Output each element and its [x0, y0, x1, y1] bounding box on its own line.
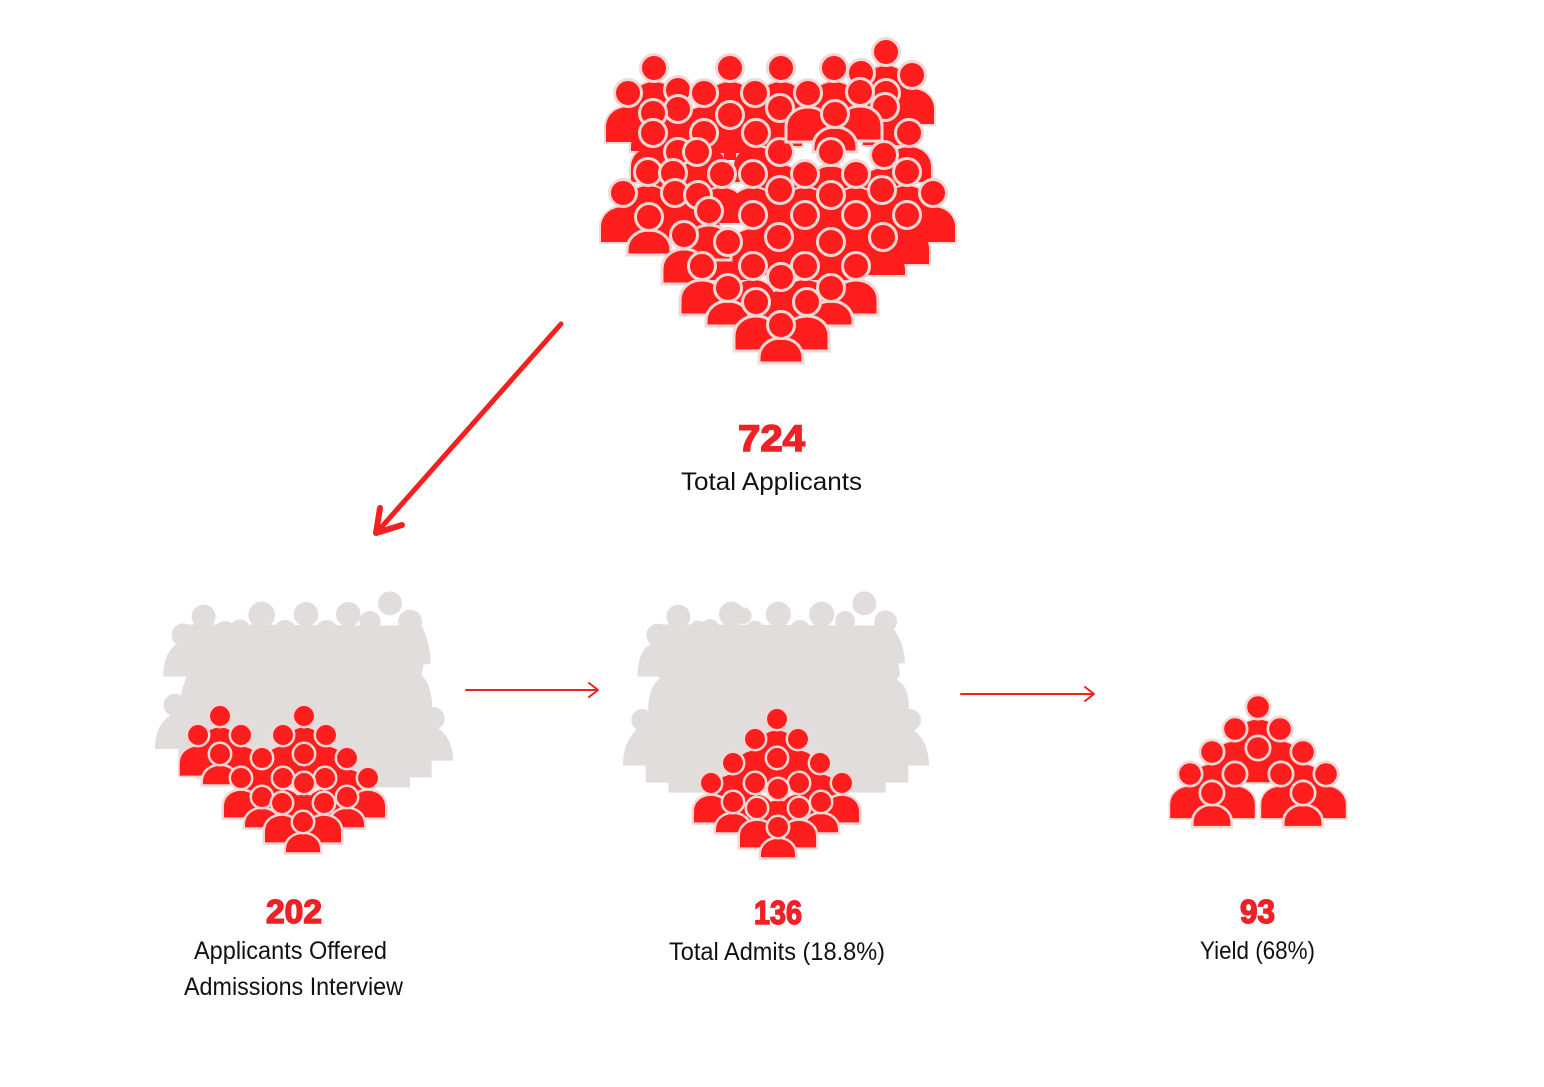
pictogram: 93 yield — [1170, 695, 1346, 827]
pictogram: 724 total applicants — [601, 38, 955, 363]
red figures: 136 — [693, 708, 860, 859]
label: total applicants: Total Applicants — [681, 468, 862, 496]
pictogram: 136 admits — [623, 591, 929, 859]
grey silhouette: all applicants — [623, 591, 929, 793]
arrow: interview to admits — [466, 683, 598, 697]
label: applicants offered admissions interview — [184, 937, 404, 1001]
arrow: admits to yield — [961, 687, 1094, 701]
label: applicants offered admissions interview: Applicants Offered — [194, 937, 387, 965]
label: applicants offered admissions interview: Admissions Interview — [184, 973, 404, 1001]
red figures: 202 — [180, 705, 386, 854]
grey silhouette: all applicants — [155, 591, 453, 787]
label: yield: Yield (68%) — [1200, 937, 1315, 965]
count: 724: 724 — [738, 418, 805, 459]
label: total admits: Total Admits (18.8%) — [669, 938, 885, 966]
count: 93: 93 — [1240, 893, 1275, 930]
pictogram: 202 interview offers — [155, 591, 453, 854]
count: 136: 136 — [754, 894, 802, 931]
arrow: applicants to interview — [376, 324, 561, 533]
count: 202: 202 — [266, 893, 322, 930]
